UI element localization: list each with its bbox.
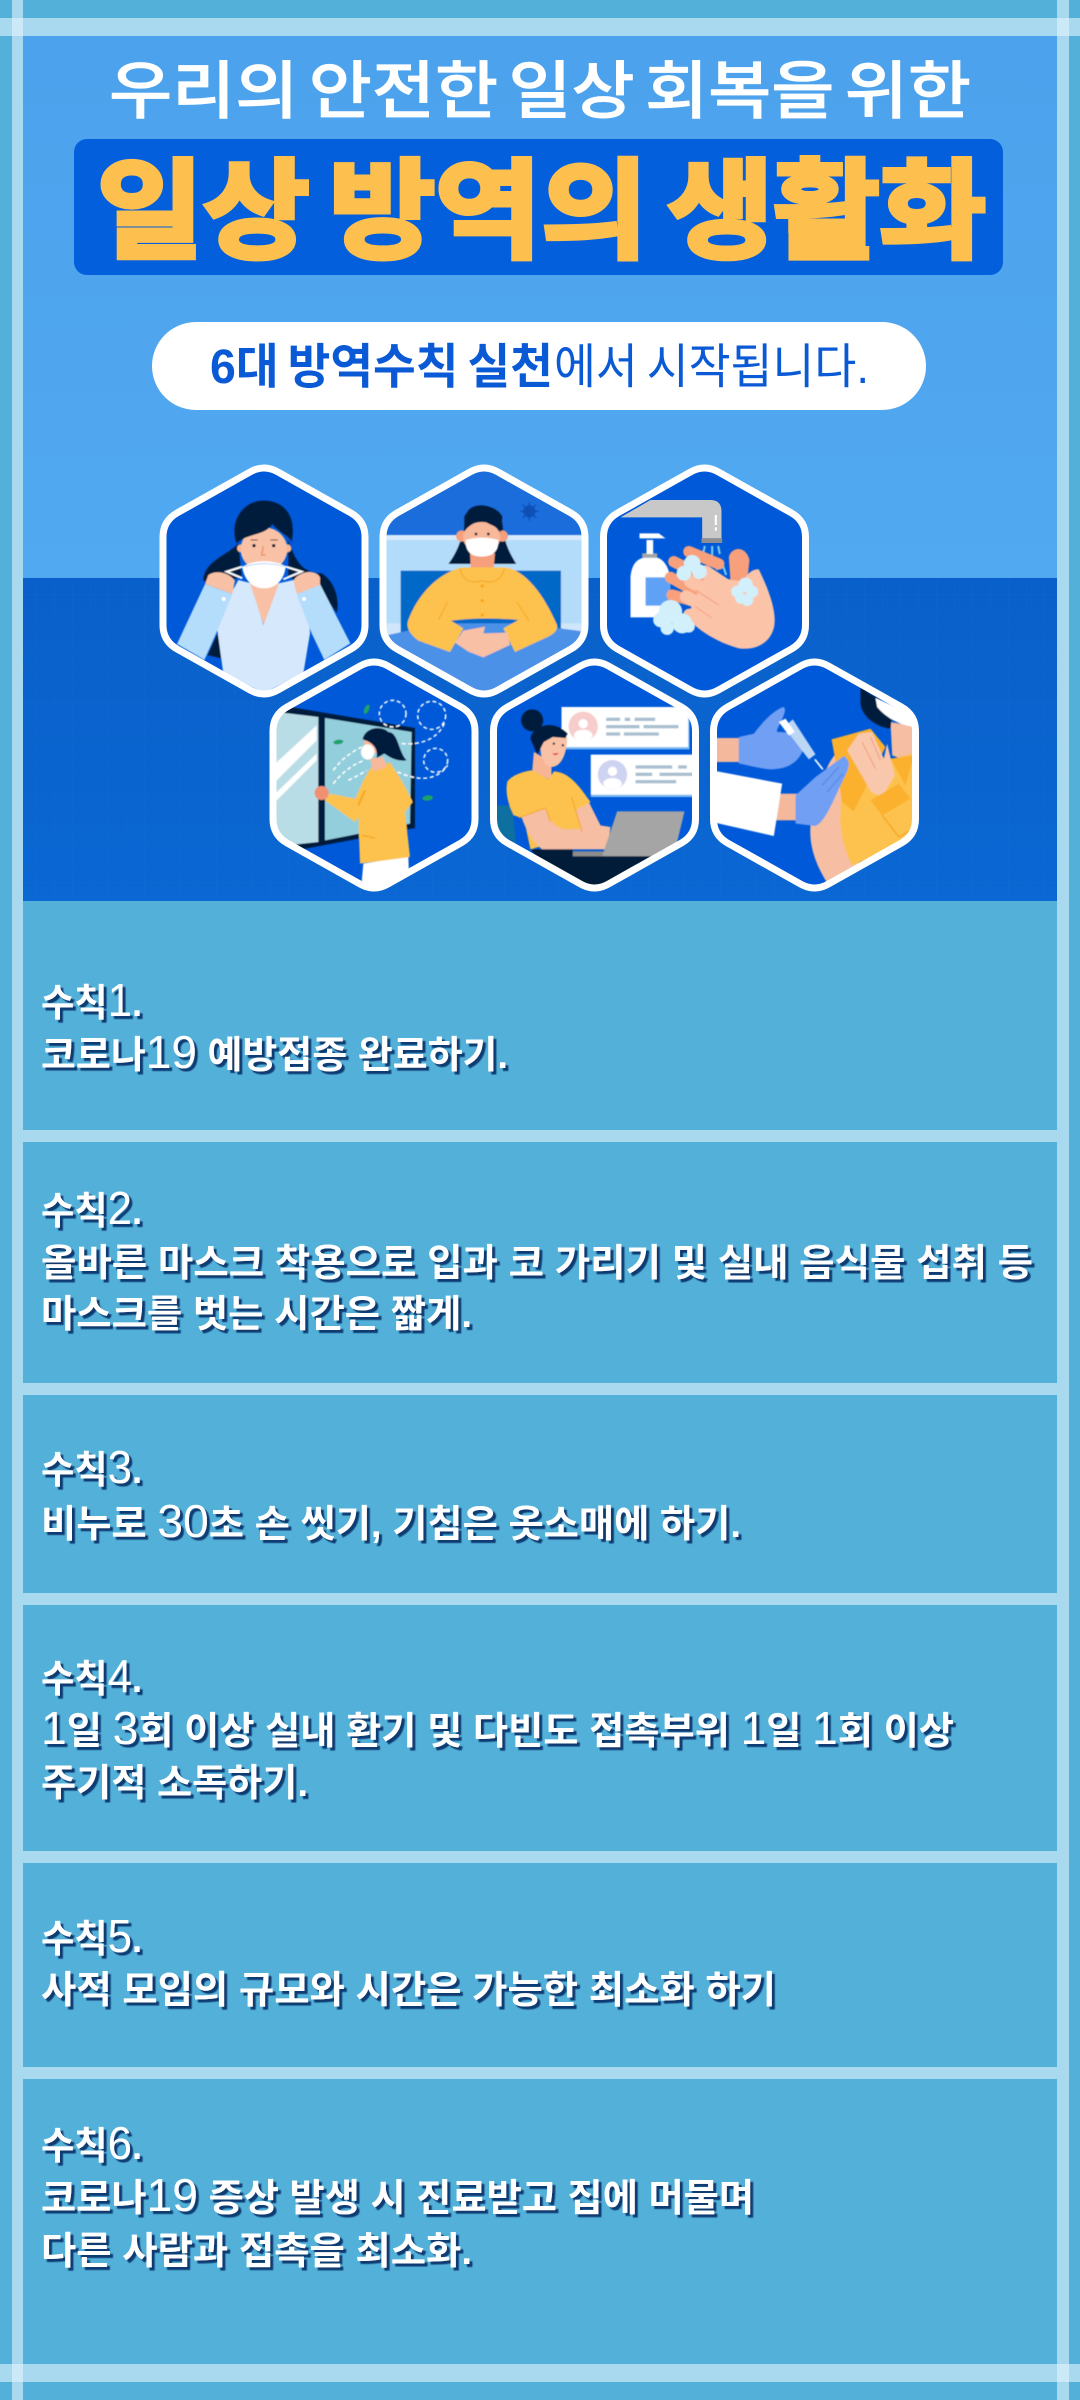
rule 1: 코로나19 예방접종 완료하기. bbox=[41, 1026, 508, 1078]
rule 4: 1일 3회 이상 실내 환기 및 다빈도 접촉부위 1일 1회 이상 bbox=[41, 1702, 954, 1754]
rule 5: 사적 모임의 규모와 시간은 가능한 최소화 하기 bbox=[41, 1970, 776, 2012]
header panel bbox=[23, 36, 1057, 901]
rule 1 bbox=[41, 974, 508, 1078]
rule 6: 코로나19 증상 발생 시 진료받고 집에 머물며 bbox=[41, 2169, 754, 2221]
rule 5: 수칙5. bbox=[41, 1910, 142, 1962]
rule 2: 올바른 마스크 착용으로 입과 코 가리기 및 실내 음식물 섭취 등 bbox=[41, 1243, 1033, 1285]
hexagon: putting on mask bbox=[163, 468, 365, 694]
rule 2: 수칙2. bbox=[41, 1182, 142, 1234]
rule 4 bbox=[41, 1650, 954, 1805]
divider bars bbox=[23, 1130, 1057, 2079]
hexagon: ventilating room bbox=[272, 662, 475, 894]
hexagon: vaccination bbox=[712, 662, 919, 888]
rule 5 bbox=[41, 1910, 776, 2012]
rule 6: 다른 사람과 접촉을 최소화. bbox=[41, 2231, 472, 2273]
rule 2: 마스크를 벗는 시간은 짧게. bbox=[41, 1294, 472, 1336]
hexagon: staying at home in mask bbox=[375, 468, 595, 700]
rule 2 bbox=[41, 1182, 1033, 1336]
subtitle pill: 6대 방역수칙 실천 bbox=[210, 341, 553, 394]
rule 4: 수칙4. bbox=[41, 1650, 142, 1702]
rule 3: 수칙3. bbox=[41, 1441, 142, 1493]
hexagon: video meeting at laptop bbox=[494, 662, 697, 892]
rule 3 bbox=[41, 1441, 741, 1547]
rule 6 bbox=[41, 2117, 754, 2273]
hexagon: washing hands bbox=[604, 468, 806, 694]
rule 6: 수칙6. bbox=[41, 2117, 142, 2169]
rule 3: 비누로 30초 손 씻기, 기침은 옷소매에 하기. bbox=[41, 1495, 741, 1547]
rule 1: 수칙1. bbox=[41, 974, 142, 1026]
title line: 우리의 안전한 일상 회복을 위한 bbox=[109, 57, 971, 127]
main title banner: 일상 방역의 생활화 bbox=[97, 151, 986, 272]
rule 4: 주기적 소독하기. bbox=[41, 1763, 308, 1805]
subtitle pill bbox=[152, 322, 926, 410]
subtitle pill: 에서 시작됩니다. bbox=[554, 341, 869, 394]
